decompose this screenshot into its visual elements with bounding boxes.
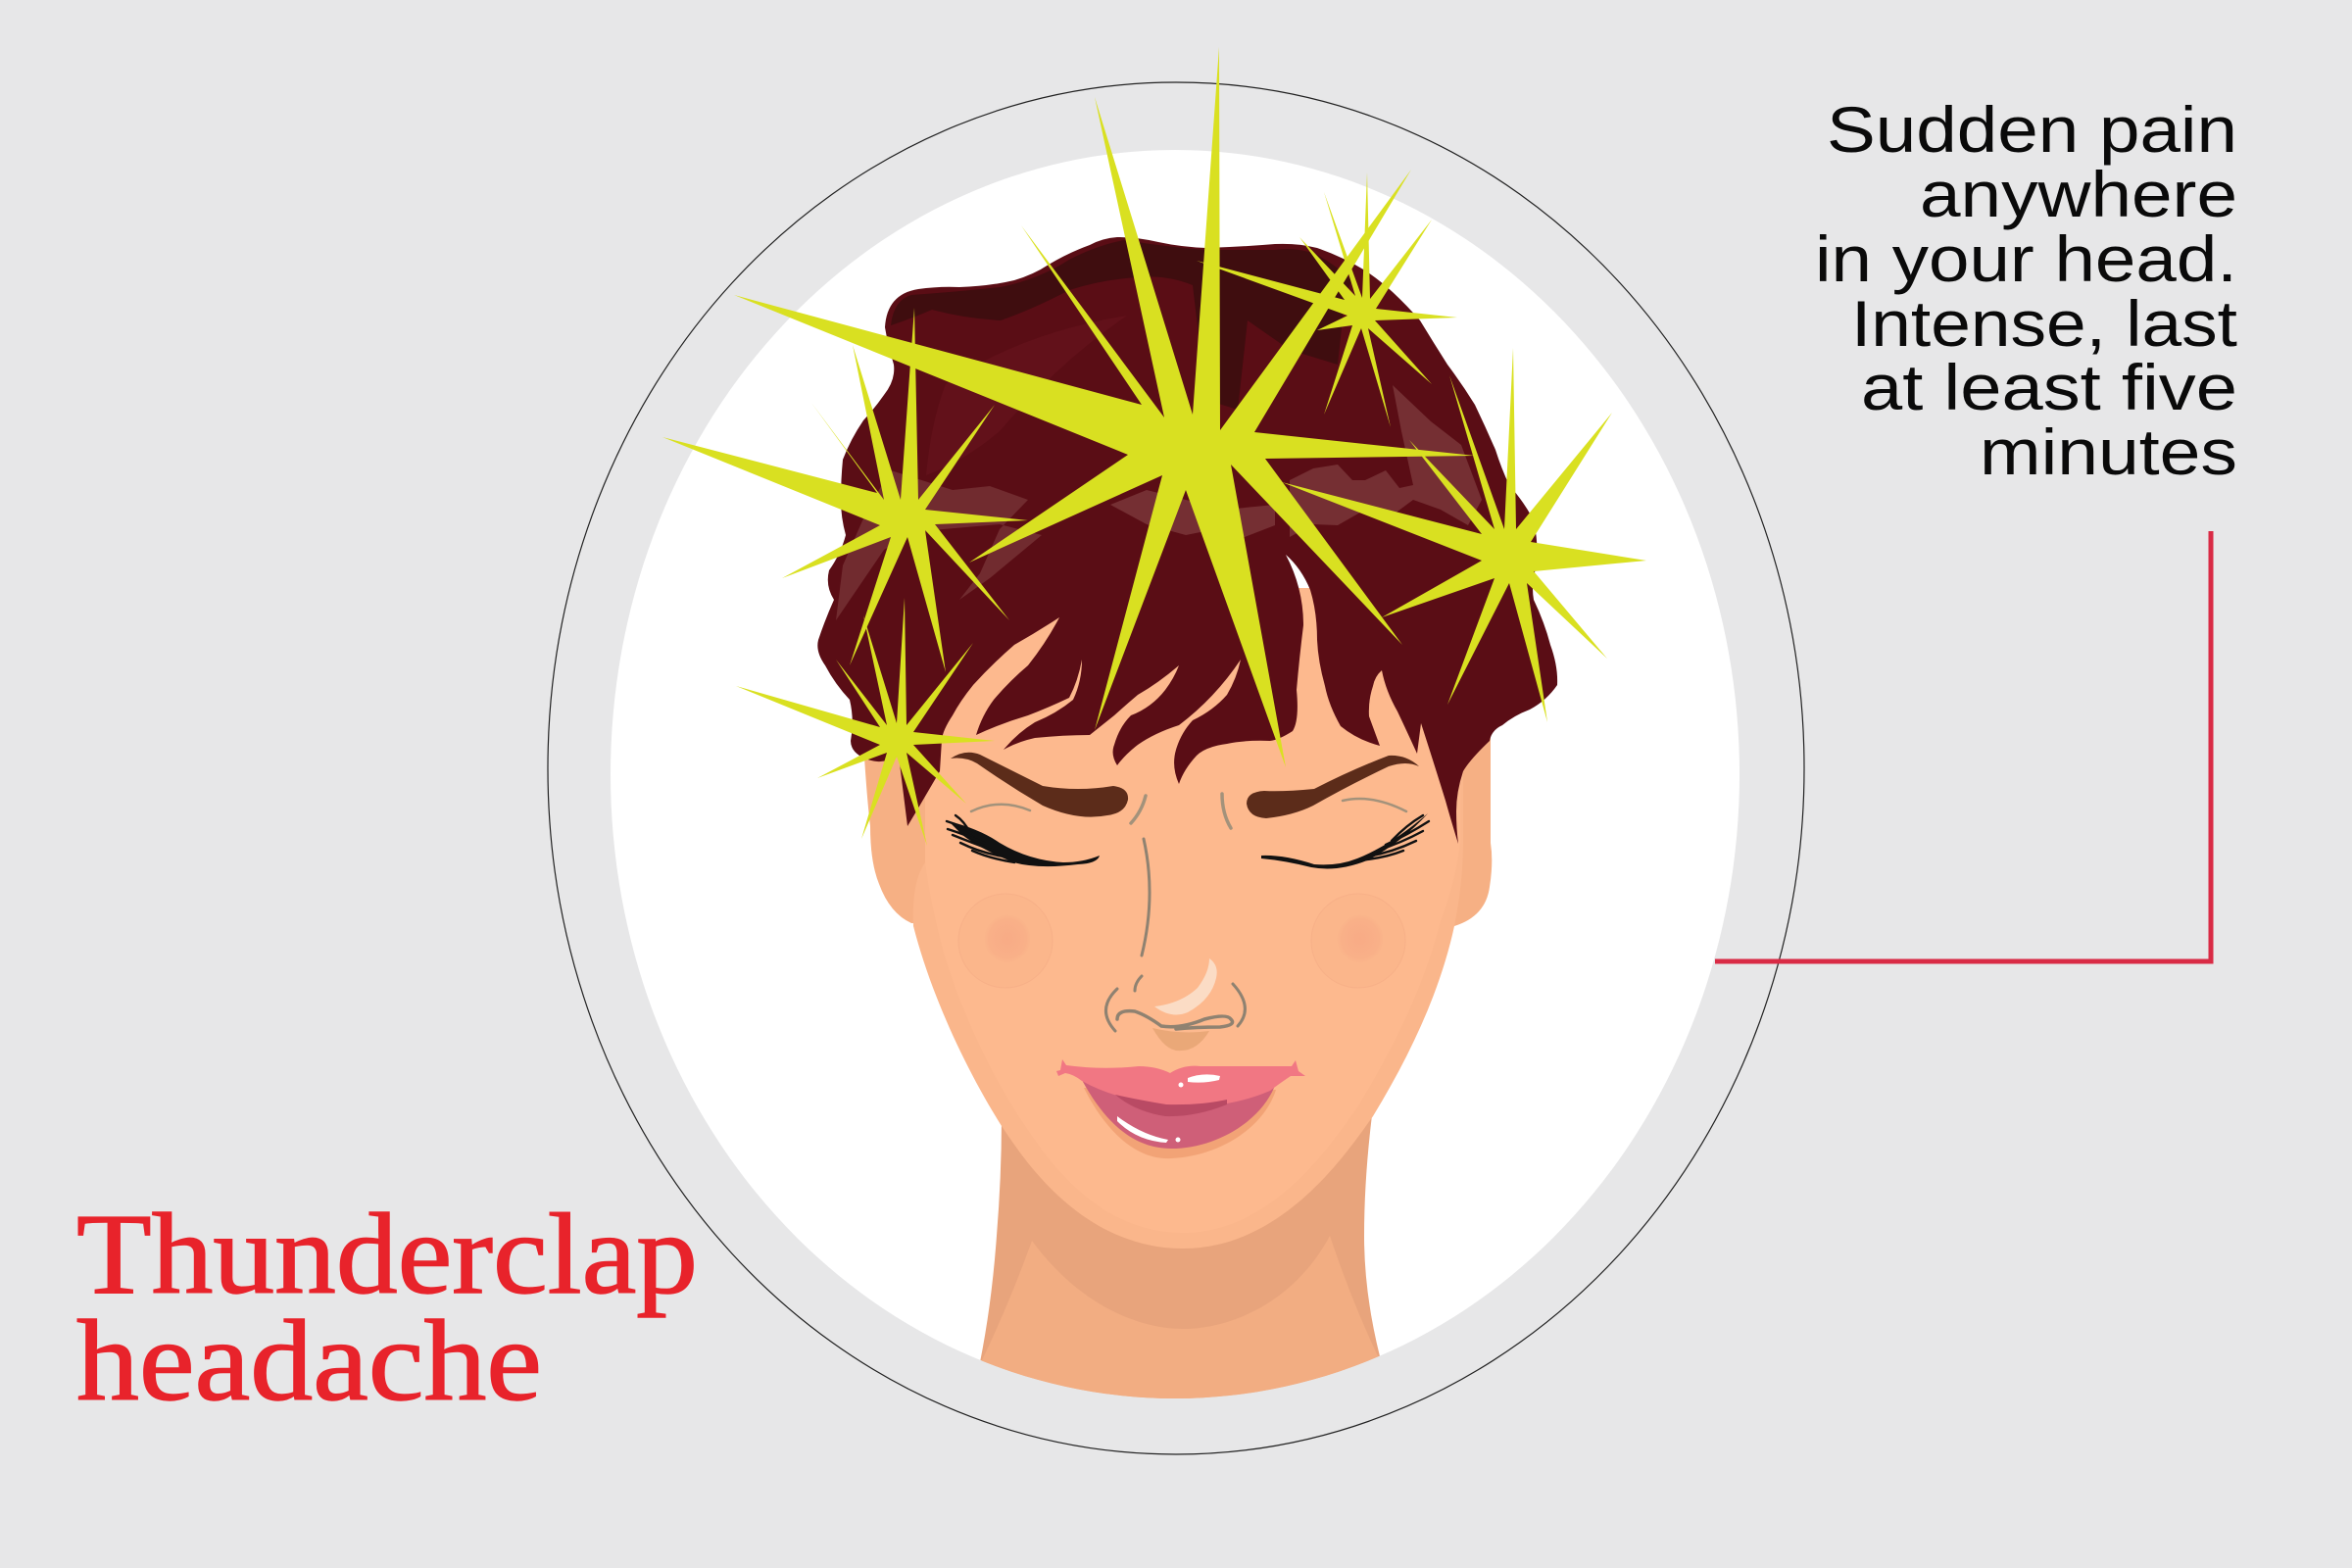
- star: right: [1282, 348, 1646, 722]
- hair: dark crown shadow: [891, 240, 1351, 410]
- right closed eye with lashes: [1261, 813, 1429, 868]
- neck: [980, 1107, 1382, 1411]
- outer oval outline: [548, 82, 1804, 1454]
- white oval panel: [611, 150, 1740, 1398]
- left closed eye with lashes: [947, 815, 1100, 866]
- star: left: [662, 308, 1028, 672]
- hair: shine left: [836, 470, 1042, 620]
- pain stars: [662, 47, 1646, 846]
- callout description text: [1815, 93, 2237, 488]
- hair: shine right: [1290, 385, 1482, 537]
- face inner: [925, 588, 1460, 1233]
- eyelid creases and frown lines: [971, 794, 1406, 828]
- hair: shine middle: [1110, 490, 1275, 537]
- ears and sides of face: [862, 725, 1492, 926]
- callout leader line: [1715, 531, 2211, 961]
- star: centre, largest: [734, 47, 1475, 767]
- right eyebrow: [1247, 756, 1419, 818]
- mouth: [1056, 1059, 1305, 1158]
- callout description text: Intense, last: [1851, 287, 2237, 360]
- callout description text: Sudden pain: [1827, 93, 2237, 166]
- callout description text: anywhere: [1920, 158, 2237, 230]
- hair: [817, 237, 1557, 844]
- hair: lighter strands: [926, 316, 1127, 475]
- left cheek: [958, 894, 1053, 988]
- left eyebrow: [951, 753, 1128, 817]
- star: lower left: [736, 598, 995, 846]
- right cheek: [1311, 894, 1405, 988]
- star: top right: [1197, 172, 1457, 427]
- illustration: woman's head: [817, 237, 1557, 1411]
- face outer edge: [913, 588, 1463, 1249]
- title: Thunderclap: [76, 1190, 698, 1318]
- callout description text: at least five: [1861, 351, 2237, 423]
- callout description text: in your head.: [1815, 222, 2237, 295]
- nose: [1105, 839, 1245, 1051]
- title: [76, 1190, 698, 1425]
- title: headache: [76, 1297, 542, 1425]
- callout description text: minutes: [1980, 416, 2237, 488]
